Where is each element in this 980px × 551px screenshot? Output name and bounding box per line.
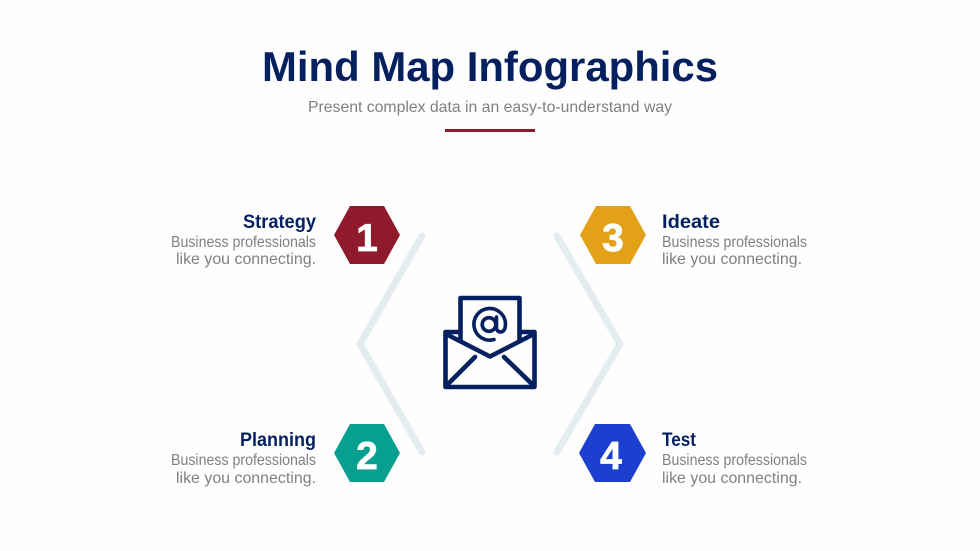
right chevron bbox=[557, 236, 620, 452]
number 3: 3 bbox=[602, 217, 624, 260]
item 1: Strategy bbox=[171, 206, 400, 268]
title underline bbox=[445, 129, 535, 132]
number 2: 2 bbox=[356, 435, 378, 478]
hexagon 3 bbox=[580, 206, 646, 264]
description line 1: Business professionals bbox=[662, 452, 807, 469]
hexagon 2 bbox=[334, 424, 400, 482]
description line 2: like you connecting. bbox=[176, 251, 316, 268]
subtitle: Present complex data in an easy-to-understand way bbox=[308, 99, 672, 116]
heading: Ideate: Ideate bbox=[662, 212, 720, 233]
item 4: Test bbox=[579, 424, 807, 487]
number 1: 1 bbox=[356, 217, 378, 260]
item 2: Planning bbox=[171, 424, 400, 487]
description line 1: Business professionals bbox=[662, 234, 807, 251]
title: Mind Map Infographics bbox=[262, 43, 718, 90]
description line 2: like you connecting. bbox=[176, 470, 316, 487]
description line 1: Business professionals bbox=[171, 452, 316, 469]
hexagon 4 bbox=[579, 424, 646, 482]
item 3: Ideate bbox=[580, 206, 807, 268]
description line 1: Business professionals bbox=[171, 234, 316, 251]
left chevron bbox=[360, 236, 422, 452]
heading: Strategy: Strategy bbox=[243, 212, 316, 233]
hexagon 1 bbox=[334, 206, 400, 264]
description line 2: like you connecting. bbox=[662, 251, 802, 268]
description line 2: like you connecting. bbox=[662, 470, 802, 487]
icon: envelope with at sign bbox=[446, 298, 534, 387]
heading: Test: Test bbox=[662, 430, 697, 451]
heading: Planning: Planning bbox=[240, 430, 316, 451]
number 4: 4 bbox=[600, 435, 622, 478]
